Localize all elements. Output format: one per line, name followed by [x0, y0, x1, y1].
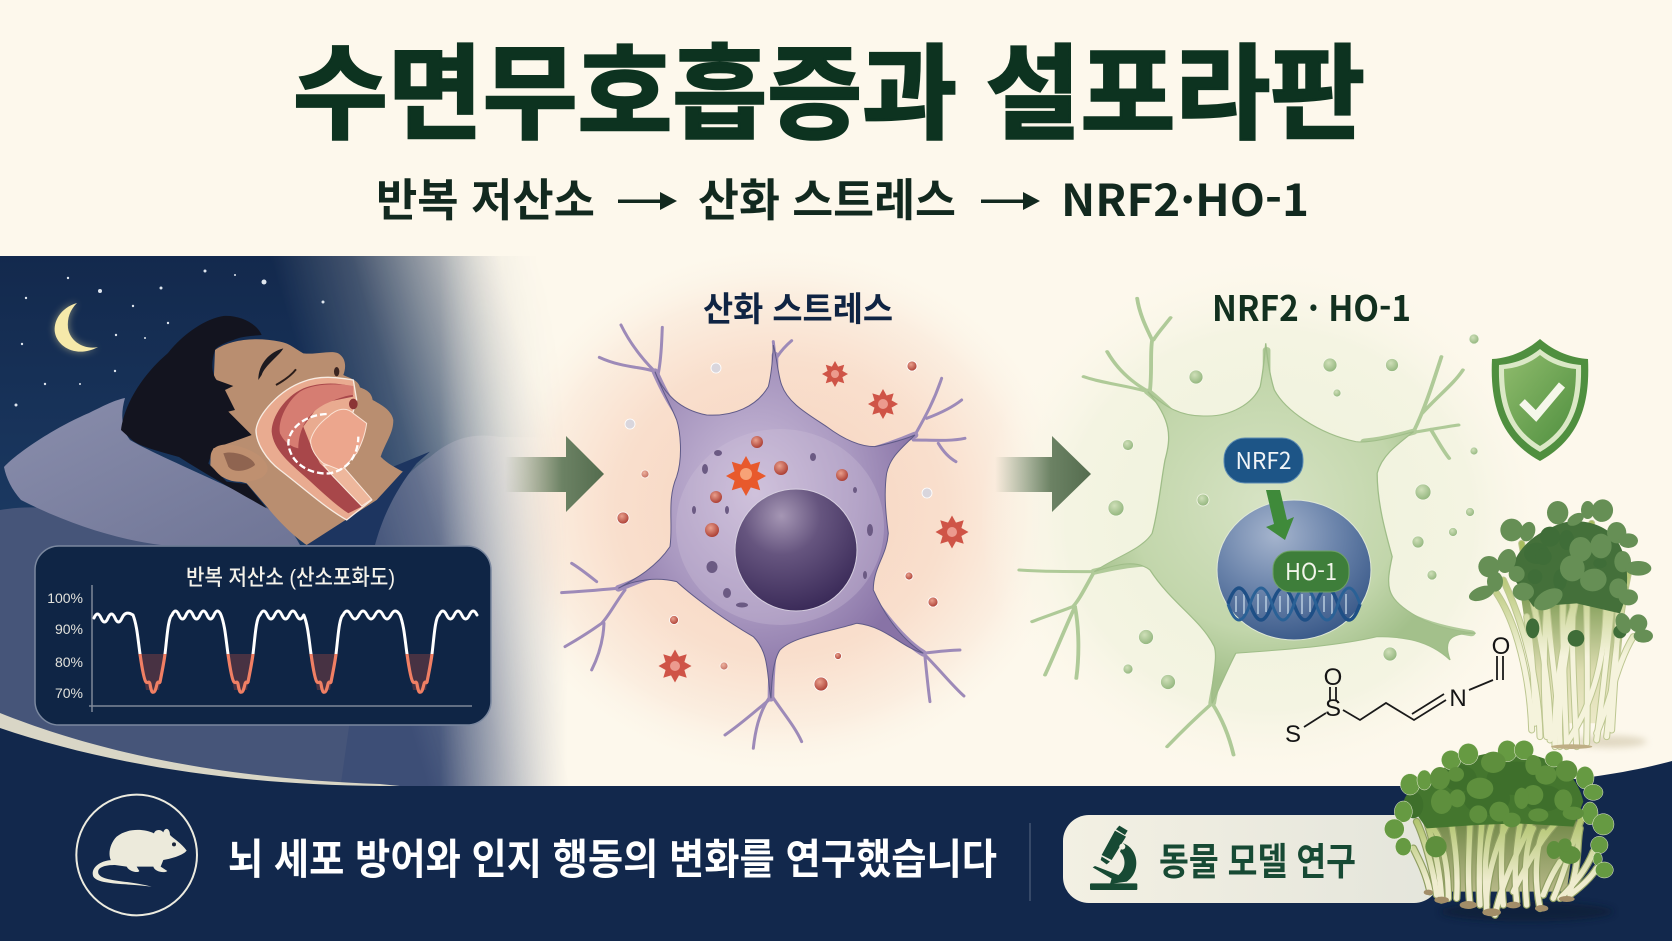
NRF2 pill [1224, 438, 1303, 483]
hair [121, 316, 267, 508]
nucleus [735, 489, 857, 611]
low oxygen shading [140, 654, 432, 690]
HO-1 pill [1273, 551, 1349, 592]
heading: oxidative stress: 산화 스트레스 [703, 291, 893, 329]
broccoli sprouts: lower bunch [1384, 740, 1614, 922]
green neuron [1019, 298, 1476, 755]
arrow: subtitle step two [981, 192, 1040, 210]
airway cross-section [256, 377, 372, 520]
face [210, 339, 403, 545]
vesicles [692, 450, 873, 608]
pill: animal model study [1063, 815, 1440, 903]
divider [1030, 823, 1031, 901]
sulforaphane molecule [1285, 633, 1510, 748]
sulforaphane molecule: S [1285, 721, 1301, 748]
chart title: 반복 저산소 (산소포화도) [186, 565, 395, 590]
head and airway [121, 316, 430, 545]
subtitle step: NRF2 HO-1: NRF2·HO-1 [1061, 165, 1309, 229]
obstruction dashed ring [288, 414, 358, 473]
arrow: hypoxia to oxidative stress [505, 436, 604, 512]
icon: microscope [1090, 826, 1137, 890]
saturation curve: desaturation dips [138, 654, 434, 694]
subtitle flow [376, 165, 1309, 229]
sulforaphane molecule: S [1325, 695, 1341, 722]
subtitle step: repeated hypoxia: 반복 저산소 [376, 175, 595, 226]
NRF2 pill: NRF2 [1236, 442, 1292, 476]
panel: oxygen saturation chart [35, 546, 491, 725]
nostril [334, 367, 339, 376]
purple neuron [562, 325, 965, 748]
broccoli sprouts: upper bunch [1467, 496, 1653, 749]
free radical dots [617, 361, 938, 691]
pill label: 동물 모델 연구 [1159, 842, 1356, 884]
y axis labels [47, 590, 83, 701]
NRF2 to HO-1 arrow [1266, 490, 1294, 540]
y axis labels: 90% [55, 621, 83, 637]
nucleus [1217, 500, 1371, 640]
icon: mouse in circle [76, 795, 197, 915]
antioxidant droplets [1108, 334, 1479, 690]
tongue [311, 409, 367, 470]
arrow: subtitle step one [618, 192, 677, 210]
pale green glow behind protected cell [980, 250, 1560, 790]
panel: oxidative stress [562, 291, 968, 748]
subtitle step: oxidative stress: 산화 스트레스 [698, 175, 956, 226]
night sky and bedding backdrop [0, 256, 558, 786]
saturation curve: normal range [92, 610, 479, 654]
axes [89, 585, 472, 712]
heading: NRF2 HO-1: NRF2 · HO-1 [1212, 281, 1411, 332]
sulforaphane molecule: O [1492, 633, 1510, 660]
DNA helix [1228, 588, 1360, 620]
arrow: oxidative stress to NRF2 response [995, 436, 1091, 512]
reactive oxygen species stars [658, 361, 968, 682]
title: 수면무호흡증과 설포라판 [293, 37, 1365, 152]
HO-1 pill: HO-1 [1285, 553, 1337, 587]
internal radicals [705, 436, 848, 537]
sulforaphane molecule: N [1449, 685, 1467, 712]
eyebrow [258, 348, 283, 380]
pink glow behind stressed cell [480, 240, 1080, 780]
sulforaphane molecule: O [1324, 664, 1342, 691]
main message: 뇌 세포 방어와 인지 행동의 변화를 연구했습니다 [228, 836, 997, 883]
y axis labels: 70% [55, 685, 83, 701]
panel: NRF2 HO-1 response [76, 281, 1653, 922]
ear [211, 445, 268, 482]
y axis labels: 80% [55, 654, 83, 670]
curved bottom band [0, 713, 1672, 941]
panel: sleeping person at night [0, 256, 558, 786]
closed eye [276, 369, 296, 385]
bottom bar [76, 795, 1440, 915]
icon: protective shield with check [1492, 339, 1588, 461]
y axis labels: 100% [47, 590, 83, 606]
shirt collar [307, 452, 430, 545]
stars [14, 270, 324, 406]
moon [55, 303, 98, 352]
pillow [4, 398, 300, 545]
